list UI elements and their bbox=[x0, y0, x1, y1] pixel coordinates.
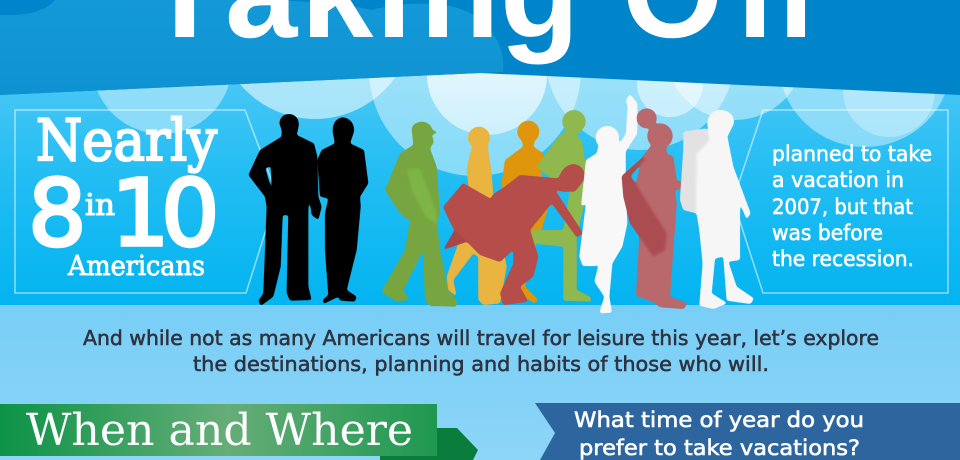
silhouette: green hiker bbox=[382, 122, 457, 307]
intro text: the destinations, planning and habits of those who will. bbox=[193, 352, 769, 376]
silhouette: woman with bag bbox=[622, 108, 687, 309]
silhouette: light green man bbox=[532, 110, 592, 302]
stat: Nearly 8 in 10 Americans: 10 bbox=[111, 160, 220, 267]
header band bbox=[0, 0, 960, 95]
stat: Nearly 8 in 10 Americans: 8 bbox=[28, 160, 87, 267]
silhouette: red man with bag bbox=[443, 164, 585, 305]
callout text: was before bbox=[772, 221, 883, 245]
stat: Nearly 8 in 10 Americans: Nearly bbox=[36, 108, 218, 174]
question banner: What time of year do you bbox=[574, 408, 864, 432]
silhouette: man one bbox=[248, 114, 322, 306]
callout text: a vacation in bbox=[772, 168, 904, 192]
silhouette: white figure with raised arm bbox=[579, 94, 637, 313]
silhouette: yellow walker bbox=[447, 127, 507, 305]
silhouette: orange woman bbox=[502, 121, 548, 303]
callout text: 2007, but that bbox=[772, 195, 913, 219]
callout: right box bbox=[733, 110, 948, 293]
callout: left box bbox=[15, 108, 277, 293]
sky scene background bbox=[0, 73, 960, 305]
stat: Nearly 8 in 10 Americans: in bbox=[85, 188, 115, 223]
callout text: the recession. bbox=[772, 247, 914, 271]
question banner bbox=[535, 403, 960, 460]
silhouette: man two bbox=[317, 117, 368, 304]
silhouette: backpacker bbox=[680, 110, 754, 309]
silhouettes: travellers bbox=[248, 94, 754, 313]
intro text bbox=[83, 326, 879, 376]
stat: Nearly 8 in 10 Americans: Americans bbox=[67, 251, 205, 282]
lower background panel bbox=[0, 305, 960, 460]
question banner: prefer to take vacations? bbox=[579, 436, 860, 460]
callout text: planned to take bbox=[772, 142, 932, 166]
section heading: When and Where: When and Where bbox=[26, 405, 413, 456]
stat: Nearly 8 in 10 Americans bbox=[28, 108, 220, 282]
callout text bbox=[772, 142, 932, 271]
intro text: And while not as many Americans will travel for leisure this year, let’s explore bbox=[83, 326, 879, 350]
